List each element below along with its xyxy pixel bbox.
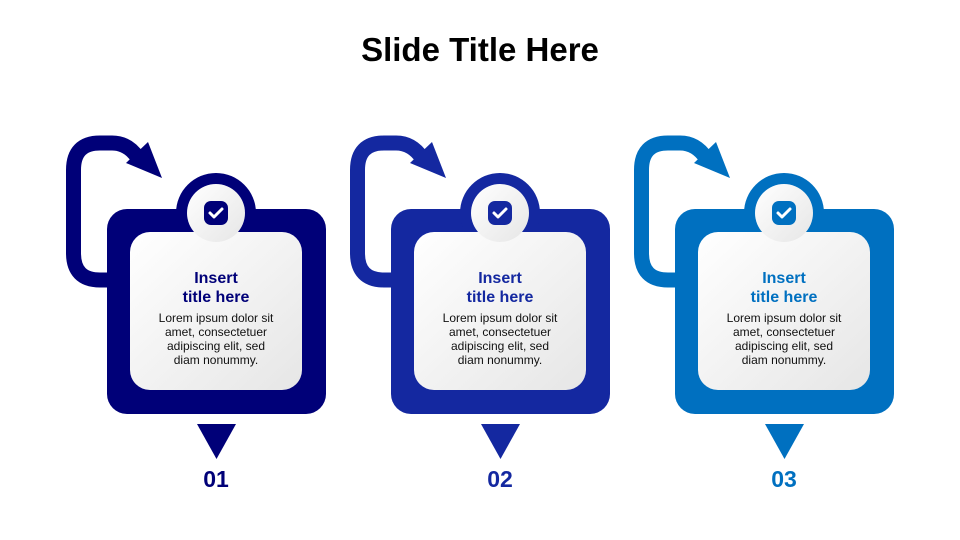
text 2: diam nonummy. (458, 353, 542, 367)
text 1: title here (183, 289, 249, 306)
text 3: amet, consectetuer (733, 325, 835, 339)
text 3: Insert (762, 270, 806, 287)
text 1: amet, consectetuer (165, 325, 267, 339)
text 2: title here (467, 289, 533, 306)
loop arrow 1 (74, 142, 162, 280)
number 01: 01 (203, 466, 229, 492)
text 2: Insert (478, 270, 522, 287)
panel 2 (358, 142, 610, 459)
text 3: diam nonummy. (742, 353, 826, 367)
text 1: adipiscing elit, sed (167, 339, 265, 353)
pointer (197, 424, 236, 459)
text 3: adipiscing elit, sed (735, 339, 833, 353)
text 1: Insert (194, 270, 238, 287)
text 3 (727, 270, 842, 367)
number 03: 03 (771, 466, 797, 492)
title: Slide Title Here (361, 31, 599, 68)
text 3: title here (751, 289, 817, 306)
panel 3 (642, 142, 894, 459)
icon check (204, 201, 228, 225)
number 02: 02 (487, 466, 513, 492)
text 1 (159, 270, 274, 367)
text 1: diam nonummy. (174, 353, 258, 367)
text 2 (443, 270, 558, 367)
text 2: amet, consectetuer (449, 325, 551, 339)
text 2: Lorem ipsum dolor sit (443, 311, 557, 325)
text 3: Lorem ipsum dolor sit (727, 311, 841, 325)
text 2: adipiscing elit, sed (451, 339, 549, 353)
text 1: Lorem ipsum dolor sit (159, 311, 273, 325)
panel 1 (74, 142, 326, 459)
